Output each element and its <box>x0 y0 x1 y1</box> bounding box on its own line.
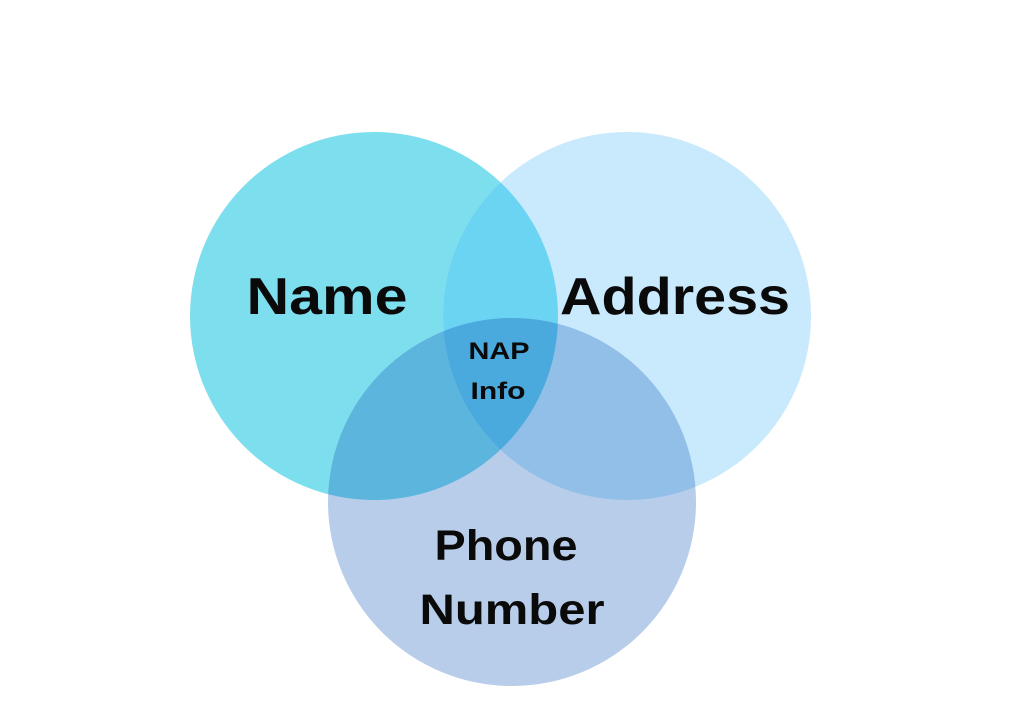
overlap: name and phone <box>328 331 500 500</box>
label: Name: Name <box>246 268 408 326</box>
circle: phone number <box>328 318 696 686</box>
label: NAP Info <box>468 338 530 405</box>
circle: name <box>190 132 558 500</box>
label: Phone Number: Phone <box>434 522 578 570</box>
label: Phone Number: Number <box>420 586 605 634</box>
label: NAP Info: Info <box>470 378 526 405</box>
label: Address: Address <box>560 268 790 326</box>
overlap: address and phone <box>444 318 696 500</box>
circle: address <box>443 132 811 500</box>
label: Phone Number <box>420 522 605 634</box>
label: NAP Info: NAP <box>468 338 530 365</box>
overlap: name and address <box>443 182 558 331</box>
venn diagram <box>190 132 811 686</box>
overlap: center NAP <box>444 318 558 450</box>
